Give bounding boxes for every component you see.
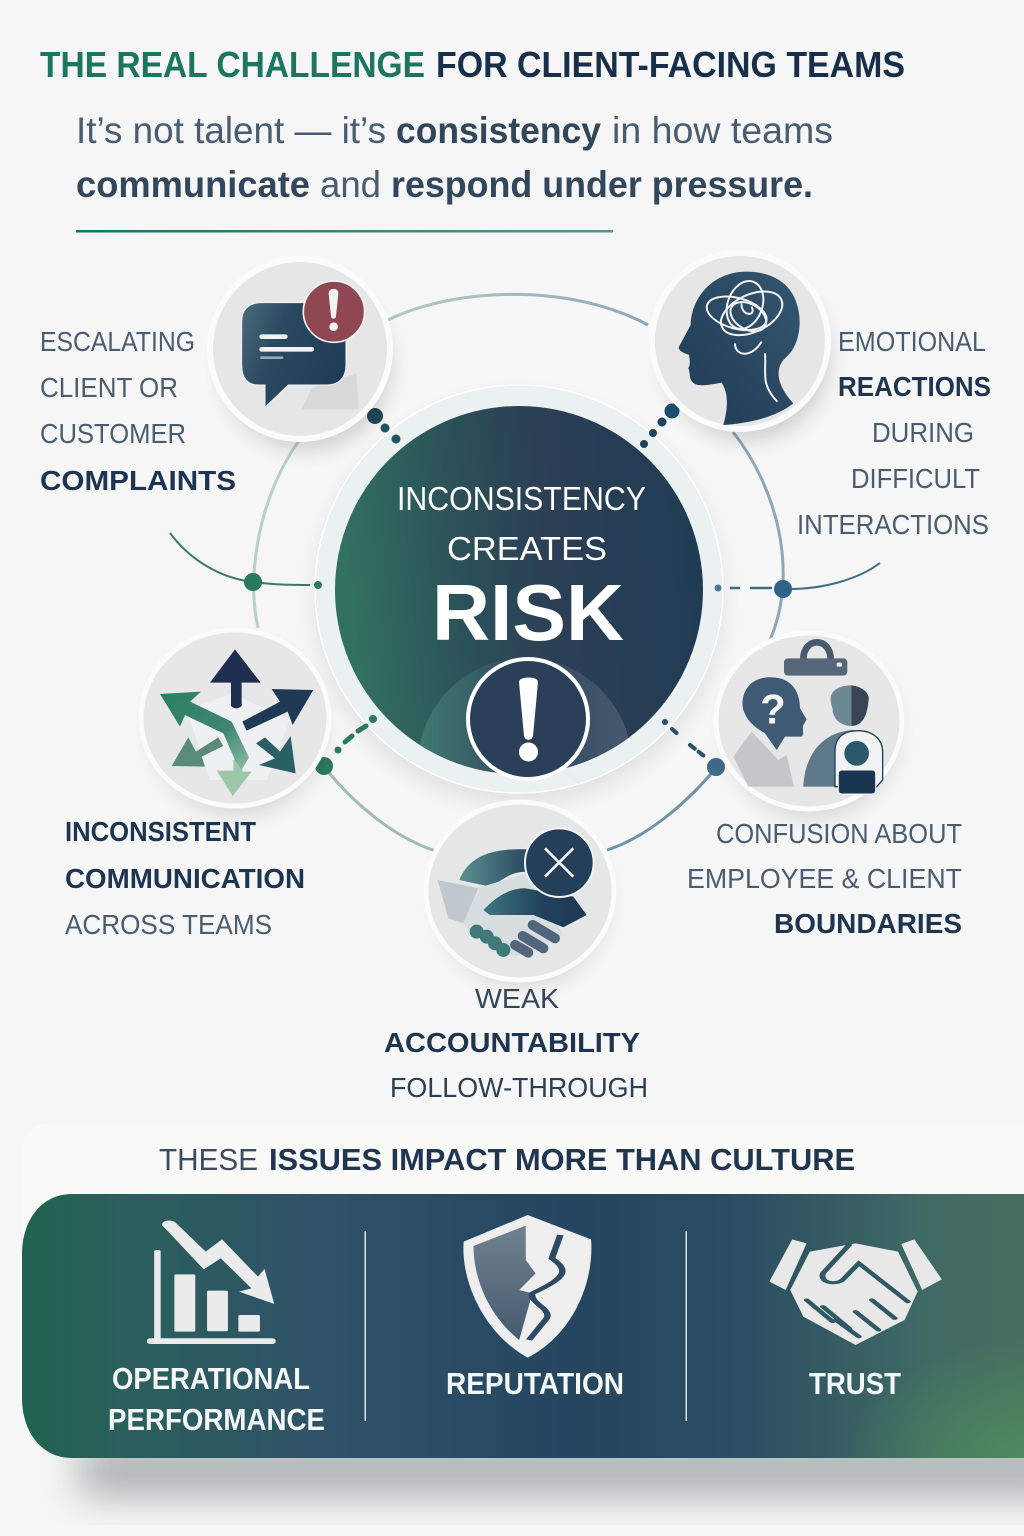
- icon: exclamation: [468, 659, 588, 786]
- center heading: INCONSISTENCY: [397, 480, 646, 517]
- banner heading: THESE: [159, 1142, 258, 1177]
- icon: head with tangled thoughts: [679, 272, 800, 425]
- label: confusion: EMPLOYEE & CLIENT: [687, 863, 962, 894]
- banner label: operational performance: PERFORMANCE: [108, 1402, 325, 1437]
- label: inconsistent: ACROSS TEAMS: [65, 909, 272, 940]
- label: confusion: BOUNDARIES: [774, 908, 962, 939]
- subtitle: respond under pressure.: [391, 164, 813, 205]
- panel: escalating complaints: [40, 259, 390, 496]
- banner background: [22, 1194, 1024, 1458]
- label: emotional: [797, 326, 991, 540]
- label: weak accountability: WEAK: [475, 983, 559, 1014]
- icon: people and lock: [733, 642, 883, 794]
- label: inconsistent: [65, 816, 305, 940]
- label: inconsistent: COMMUNICATION: [65, 863, 305, 894]
- panel: inconsistent communication: [65, 630, 329, 940]
- icon: handshake: [769, 1239, 942, 1345]
- banner label: trust: TRUST: [809, 1366, 901, 1401]
- subtitle: [76, 110, 833, 205]
- label: emotional: DIFFICULT: [851, 463, 980, 494]
- icon: people and lock: ?: [760, 685, 786, 732]
- label: escalating: CUSTOMER: [40, 418, 186, 449]
- subtitle: and: [320, 164, 381, 205]
- title: THE REAL CHALLENGE: [40, 44, 425, 85]
- icon: chat bubble with alert: [242, 281, 365, 409]
- label: confusion: CONFUSION ABOUT: [716, 818, 962, 849]
- label: weak accountability: FOLLOW-THROUGH: [390, 1072, 648, 1103]
- label: inconsistent: INCONSISTENT: [65, 816, 256, 847]
- connector dots: [244, 404, 792, 776]
- panel: confusion about boundaries: [687, 633, 962, 939]
- label: escalating: COMPLAINTS: [40, 465, 236, 496]
- center circle: inconsistency creates risk: [312, 384, 726, 804]
- label: weak accountability: [384, 983, 648, 1103]
- label: confusion: [687, 818, 962, 939]
- label: escalating: ESCALATING: [40, 326, 195, 357]
- connecting ring: [170, 294, 880, 851]
- center heading: RISK: [432, 568, 624, 657]
- label: escalating: [40, 326, 236, 496]
- label: emotional: DURING: [872, 417, 974, 448]
- label: emotional: REACTIONS: [838, 371, 991, 402]
- panel: emotional reactions: [652, 253, 991, 540]
- subtitle: communicate: [76, 164, 310, 205]
- center heading: [397, 480, 646, 657]
- subtitle: It’s not talent — it’s: [76, 110, 386, 151]
- icon: falling chart: [147, 1221, 276, 1344]
- panel: impact banner: [22, 1123, 1024, 1495]
- label: weak accountability: ACCOUNTABILITY: [384, 1027, 640, 1058]
- subtitle: consistency: [396, 110, 601, 151]
- icon: diverging arrows: [160, 649, 313, 796]
- label: escalating: CLIENT OR: [40, 372, 178, 403]
- label: emotional: INTERACTIONS: [797, 509, 989, 540]
- center heading: CREATES: [447, 530, 607, 567]
- icon: cracked shield: [463, 1215, 591, 1358]
- banner heading: ISSUES IMPACT MORE THAN CULTURE: [269, 1142, 855, 1177]
- panel: weak accountability: [384, 802, 648, 1103]
- title: FOR CLIENT-FACING TEAMS: [436, 44, 905, 85]
- subtitle: in how teams: [612, 110, 833, 151]
- icon: broken handshake: [438, 828, 594, 957]
- banner label: operational performance: [108, 1361, 325, 1437]
- label: emotional: EMOTIONAL: [838, 326, 986, 357]
- title: [40, 44, 905, 85]
- banner label: operational performance: OPERATIONAL: [112, 1361, 310, 1396]
- banner label: reputation: REPUTATION: [446, 1366, 624, 1401]
